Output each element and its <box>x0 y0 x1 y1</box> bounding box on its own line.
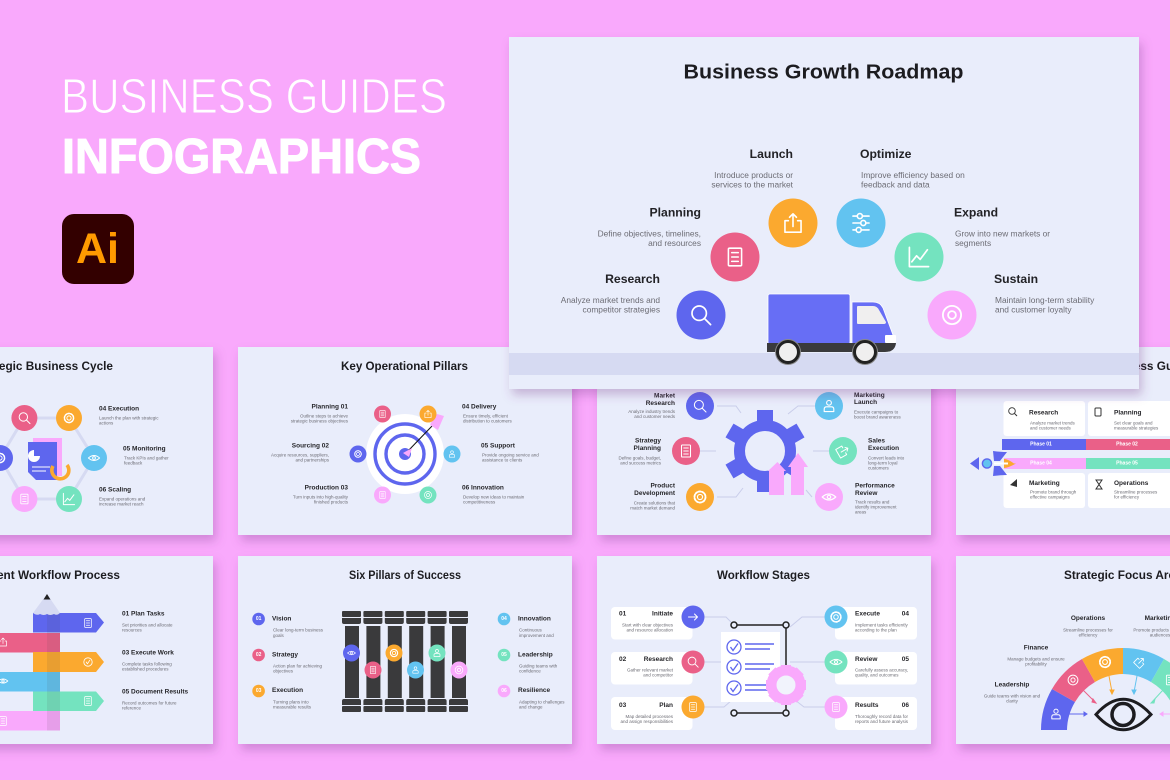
step: research: competitor strategies <box>583 304 660 314</box>
right cards <box>824 606 917 730</box>
text: right labels: distribution to customers <box>463 418 513 424</box>
text: left pillars: measurable results <box>273 704 312 710</box>
left cards: and competitor <box>643 672 673 678</box>
text: steps: reference <box>122 706 142 710</box>
panel: workflow stages <box>597 556 931 744</box>
left cards: and assign responsibilities <box>620 719 674 724</box>
step: expand <box>894 206 1050 282</box>
checklist with gear <box>721 622 806 716</box>
text: left labels: match market demand <box>630 506 675 510</box>
text: left labels: and success metrics <box>620 460 662 466</box>
right cards: Carefully assess accuracy, <box>855 668 908 672</box>
text: steps 04 to 06: increase market reach <box>99 502 144 506</box>
text: right pillars: Adapting to challenges <box>519 700 565 704</box>
text: right labels: Launch <box>854 399 877 406</box>
text: left labels: Planning 01 <box>312 404 348 410</box>
icon: rocket <box>970 451 1016 476</box>
right cards: Implement tasks efficiently <box>855 622 908 628</box>
text: right labels: 05 Support <box>481 442 516 450</box>
text: left labels: Market <box>654 392 676 400</box>
text: left pillars: 02 <box>256 652 262 658</box>
text: right labels: Execution <box>868 445 899 452</box>
text: right pillars: 05 <box>501 652 507 658</box>
left cards: Map detailed processes <box>625 714 674 719</box>
text: right pillars: Resilience <box>518 687 551 694</box>
right cards: Results <box>855 702 879 709</box>
text: labels: clarity <box>1006 698 1019 704</box>
right cards: according to the plan <box>855 628 897 632</box>
text: left labels: finished products <box>314 500 349 504</box>
left cards: and resource allocation <box>626 628 673 632</box>
road band <box>509 353 1139 375</box>
text: left pillars: Clear long-term business <box>273 628 324 632</box>
text: labels: Finance <box>1024 644 1049 652</box>
icon: delivery truck <box>767 294 896 365</box>
text: left labels: Research <box>646 400 675 407</box>
panel: phased business guide <box>956 347 1170 535</box>
text: labels: Guide teams with vision and <box>984 694 1041 698</box>
text: left pillars: objectives <box>273 668 294 674</box>
card: research: and customer needs <box>1030 426 1072 430</box>
card: planning <box>1088 401 1170 436</box>
heading: Key Operational Pillars <box>341 359 468 373</box>
card: marketing: Marketing <box>1029 480 1060 487</box>
card: planning: Planning <box>1114 410 1141 416</box>
card: planning: Set clear goals and <box>1114 420 1153 426</box>
text: steps: 01 Plan Tasks <box>122 610 165 618</box>
text: right labels: Develop new ideas to maintain <box>463 494 525 500</box>
text: left labels <box>618 392 676 510</box>
step: launch: Introduce products or <box>714 170 793 180</box>
text: left labels: Define goals, budget, <box>618 456 661 460</box>
step: optimize: Improve efficiency based on <box>861 170 965 180</box>
text: steps 04 to 06: Launch the plan with strategic <box>99 416 159 420</box>
right cards: quality, and outcomes <box>855 672 899 678</box>
text: left pillars: Action plan for achieving <box>273 664 323 668</box>
step: research: Research <box>605 272 660 286</box>
text: steps <box>122 610 188 710</box>
step: research <box>561 272 726 340</box>
text: labels: audiences <box>1150 632 1170 638</box>
step: research: Analyze market trends and <box>561 295 660 305</box>
text: right pillars: Leadership <box>518 652 553 658</box>
text: left labels: Product <box>650 482 676 490</box>
panel: key operational pillars <box>238 347 572 535</box>
text: right labels: Execute campaigns to <box>854 410 899 414</box>
card: operations <box>1088 473 1170 508</box>
text: left labels: Analyze industry trends <box>628 409 676 414</box>
text: right pillars <box>498 613 565 710</box>
phase bars: Phase 02 <box>1116 442 1138 448</box>
right cards: Execute <box>855 610 880 618</box>
phase bars: Phase 04 <box>1030 460 1052 466</box>
right cards: 06 <box>902 702 909 709</box>
text: steps: Complete tasks following <box>122 662 172 666</box>
text: left labels: and customer needs <box>634 414 676 419</box>
icon: Adobe Illustrator logo: Ai <box>76 225 119 273</box>
left cards: Research <box>644 656 673 663</box>
text: right labels: Review <box>855 490 878 497</box>
panel: six pillars of success <box>238 556 572 744</box>
left cards: Start with clear objectives <box>622 622 674 628</box>
card: research: Research <box>1029 410 1058 416</box>
text: steps 04 to 06: 05 Monitoring <box>123 446 166 452</box>
step: optimize: Optimize <box>860 147 912 161</box>
text: right labels: long-term loyal <box>868 460 898 466</box>
phase bars <box>1002 439 1170 469</box>
connector lines right <box>788 406 829 497</box>
heading: business guides: BUSINESS GUIDES <box>61 70 447 124</box>
text: right pillars: Innovation <box>518 616 551 622</box>
step: optimize <box>836 147 965 248</box>
text: left labels: Planning <box>634 445 661 452</box>
step: expand: Grow into new markets or <box>955 228 1050 238</box>
text: right labels: Provide ongoing service and <box>482 452 539 458</box>
gear with arrows <box>725 410 808 495</box>
text: left pillars: goals <box>273 633 285 638</box>
text: left labels: Outline steps to achieve <box>300 414 348 418</box>
text: steps 04 to 06: 04 Execution <box>99 406 139 412</box>
right cards: reports and future analysis <box>855 719 909 724</box>
step: launch: Launch <box>750 147 793 161</box>
text: labels: Operations <box>1071 615 1106 622</box>
text: left pillars: Vision <box>272 616 291 622</box>
heading: infographics: INFOGRAPHICS <box>62 130 421 184</box>
connector lines <box>700 406 743 497</box>
text: left labels: Turn inputs into high-quality <box>293 494 349 500</box>
text: steps: resources <box>122 628 143 632</box>
left cards: 03 <box>619 702 627 709</box>
text: steps 04 to 06: actions <box>99 420 114 426</box>
left cards: Initiate <box>652 610 673 618</box>
left cards <box>611 606 704 730</box>
text: steps: Set priorities and allocate <box>122 622 173 628</box>
card: operations: Streamline processes <box>1114 490 1158 494</box>
text: steps 04 to 06: 06 Scaling <box>99 486 131 494</box>
step: planning: Define objectives, timelines, <box>598 228 701 238</box>
panel: business growth roadmap <box>509 37 1139 389</box>
text: steps: established procedures <box>122 666 169 672</box>
card: marketing: effective campaigns <box>1030 494 1070 500</box>
panel: strategic business cycle <box>0 347 213 535</box>
text: right labels: Track results and <box>855 500 890 504</box>
text: left pillars: Strategy <box>272 652 298 658</box>
icon circles <box>672 392 857 511</box>
text: steps: 03 Execute Work <box>122 650 174 656</box>
text: right labels: Convert leads into <box>868 456 905 460</box>
right cards: Review <box>855 656 878 663</box>
card: research: Analyze market trends <box>1030 420 1076 426</box>
hexagon cycle diagram <box>0 405 107 512</box>
card: marketing: Promote brand through <box>1030 490 1077 494</box>
text: right labels: Ensure timely, efficient <box>463 414 509 418</box>
text: left pillars: 01 <box>256 616 262 622</box>
pointer arrows <box>1069 676 1170 716</box>
step: planning: and resources <box>648 238 701 248</box>
card: operations: Operations <box>1114 480 1149 487</box>
left cards: Plan <box>659 702 673 709</box>
text: right labels: customers <box>868 466 890 470</box>
text: right labels: Marketing <box>854 392 885 399</box>
text: right pillars: 04 <box>501 616 507 622</box>
pillars chart <box>342 611 468 712</box>
target chart <box>350 406 460 504</box>
text: left labels: Create solutions that <box>634 500 676 506</box>
text: left labels: Acquire resources, suppliers, <box>271 452 329 458</box>
card: planning: measurable strategies <box>1114 426 1159 430</box>
text: right pillars: confidence <box>519 668 541 674</box>
text: labels: profitability <box>1025 662 1048 666</box>
heading: Workflow Stages <box>717 568 810 582</box>
icon: Adobe Illustrator logo <box>62 214 134 284</box>
text: steps: Record outcomes for future <box>122 700 177 706</box>
connector lines <box>704 617 825 707</box>
icon: eye <box>1096 699 1151 730</box>
text: right labels: boost brand awareness <box>854 414 902 420</box>
text: left labels: Sourcing 02 <box>292 442 329 450</box>
right cards: 04 <box>902 610 909 618</box>
text: right labels: 06 Innovation <box>462 484 504 492</box>
heading: Business Growth Roadmap <box>684 60 964 84</box>
semicircle gauge <box>1041 648 1170 730</box>
text: right labels: 04 Delivery <box>462 404 497 410</box>
text: right labels: areas <box>855 510 867 514</box>
left cards: Gather relevant market <box>627 668 674 672</box>
text: right labels: Performance <box>855 482 895 490</box>
step: sustain: Maintain long-term stability <box>995 295 1095 305</box>
step: launch <box>711 147 818 248</box>
panel: strategic focus areas <box>956 556 1170 744</box>
card: marketing <box>1004 473 1085 508</box>
heading: Six Pillars of Success <box>349 568 461 582</box>
card: research <box>1004 401 1085 436</box>
text: left pillars: 03 <box>256 688 262 694</box>
text: right pillars: improvement and <box>519 633 554 638</box>
left cards: 01 <box>619 610 627 618</box>
text: labels: Leadership <box>995 682 1029 688</box>
panel: workflow process <box>0 556 213 744</box>
step: expand: segments <box>955 238 991 248</box>
text: right pillars: Continuous <box>519 628 543 632</box>
text: right labels: identify improvement <box>855 504 897 510</box>
step: sustain <box>928 272 1095 340</box>
text: right labels <box>462 404 539 504</box>
text: left pillars <box>252 613 324 710</box>
text: steps 04 to 06 <box>99 406 169 506</box>
step: sustain: and customer loyalty <box>995 304 1072 314</box>
text: right pillars: 06 <box>501 688 507 694</box>
text: right labels: competitiveness <box>463 500 496 504</box>
text: labels: Manage budgets and ensure <box>1007 656 1065 662</box>
right cards: 05 <box>902 656 909 663</box>
phase bars: Phase 01 <box>1030 442 1052 448</box>
text: left labels: Strategy <box>635 438 661 444</box>
phase bars: Phase 05 <box>1116 460 1138 466</box>
text: left labels: and partnerships <box>295 458 330 462</box>
text: steps: 05 Document Results <box>122 688 188 696</box>
step: expand: Expand <box>954 206 998 220</box>
right cards: Thoroughly record data for <box>855 714 909 719</box>
text: left labels: Production 03 <box>305 484 348 492</box>
text: right pillars: and change <box>519 704 543 710</box>
step: sustain: Sustain <box>994 272 1038 286</box>
step: planning: Planning <box>650 206 701 220</box>
text: right labels: assistance to clients <box>482 458 523 462</box>
step: planning <box>598 206 760 282</box>
card: operations: for efficiency <box>1114 494 1140 500</box>
text: left labels: strategic business objectives <box>291 418 349 424</box>
text: right labels <box>854 392 905 514</box>
step: launch: services to the market <box>711 180 794 190</box>
text: left pillars: Turning plans into <box>273 700 309 704</box>
text: left pillars: Execution <box>272 687 303 694</box>
text: steps 04 to 06: Expand operations and <box>99 496 146 502</box>
panel: gear growth diagram <box>597 347 931 535</box>
text: left labels: Development <box>634 490 676 497</box>
text: steps 04 to 06: Track KPIs and gather <box>124 456 169 460</box>
text: right pillars: Guiding teams with <box>519 664 558 668</box>
pencil ribbon chart <box>0 594 104 730</box>
text: left labels <box>271 404 349 504</box>
text: steps 04 to 06: feedback <box>124 460 143 466</box>
text: right labels: Sales <box>868 438 885 444</box>
text: labels <box>984 615 1170 704</box>
text: labels: Streamline processes for <box>1063 628 1113 632</box>
step: optimize: feedback and data <box>861 180 930 190</box>
text: labels: efficiency <box>1079 632 1098 638</box>
left cards: 02 <box>619 656 627 663</box>
